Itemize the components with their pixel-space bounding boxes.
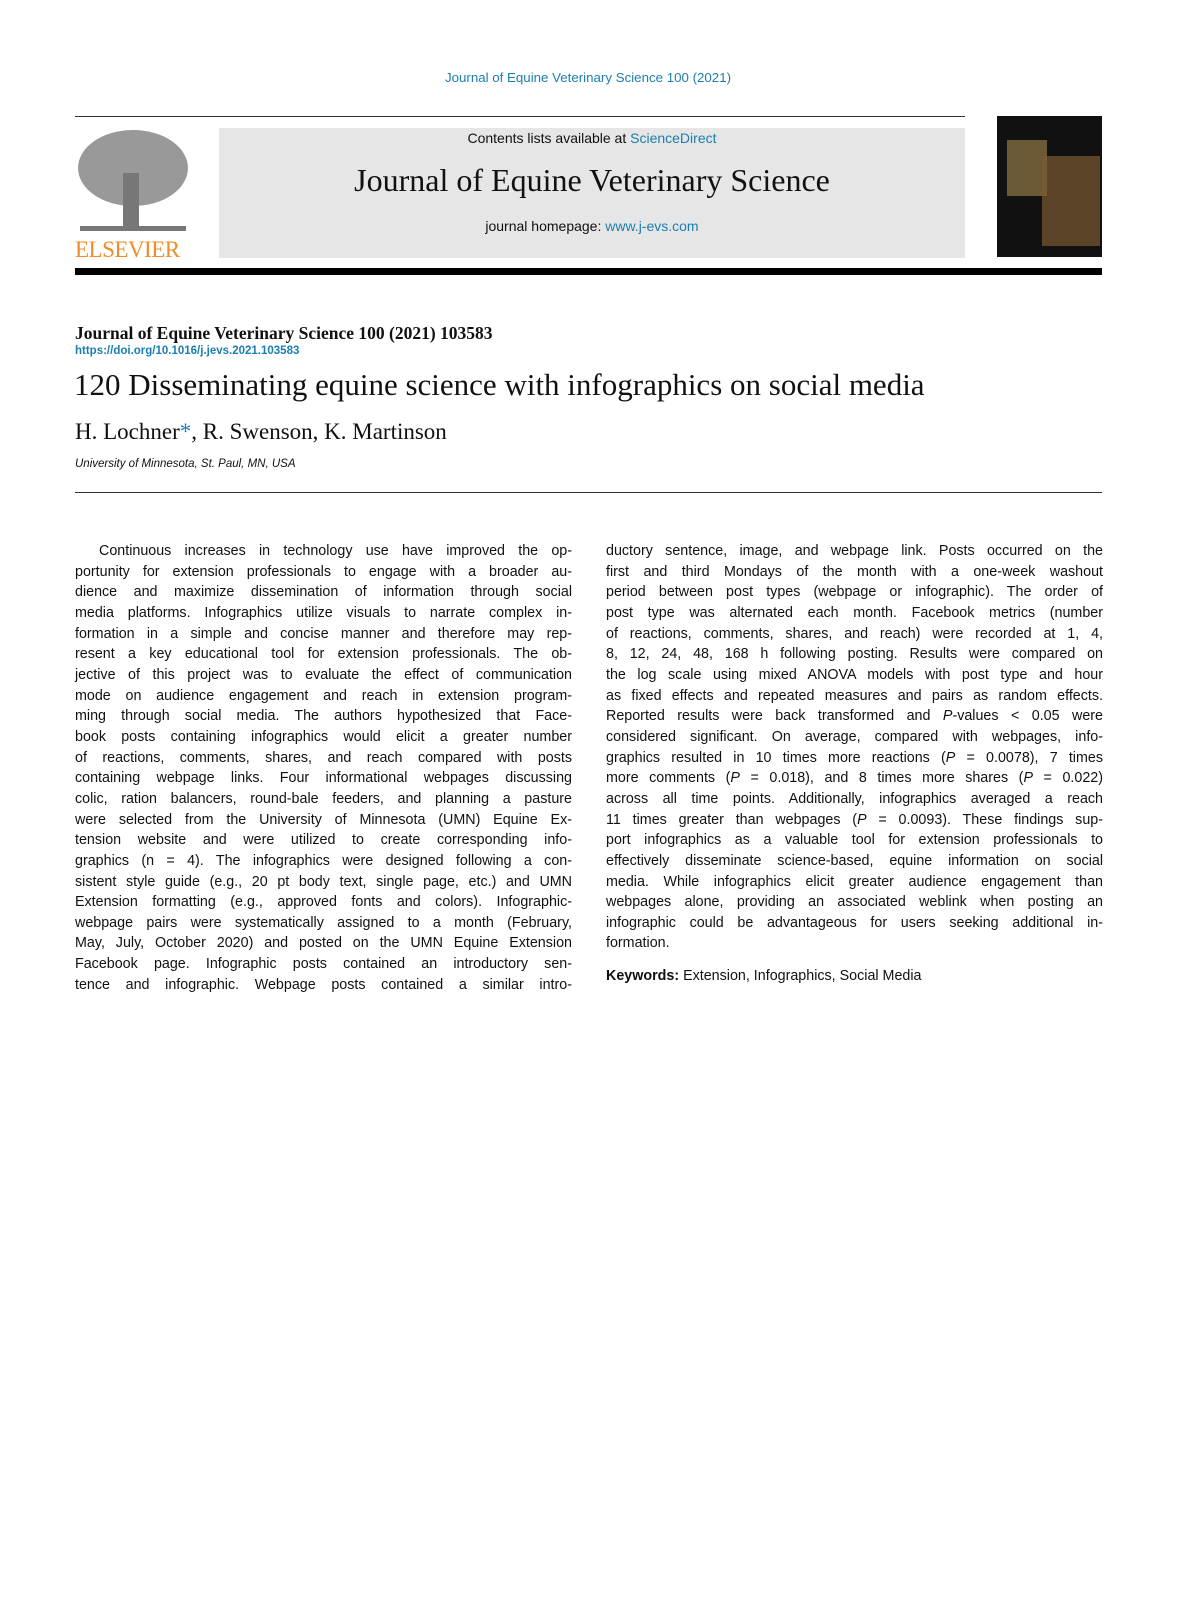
text block: left column: May, July, October 2020) and posted on the UMN Equine Extension	[75, 935, 572, 951]
masthead panel	[219, 128, 965, 258]
text block: left column: graphics (n = 4). The infographics were designed following a con-	[75, 853, 572, 869]
text block: right column: of reactions, comments, shares, and reach) were recorded at 1, 4,	[606, 626, 1103, 642]
text block: right column: post type was alternated each month. Facebook metrics (number	[606, 605, 1103, 621]
text block: right column: effectively disseminate science-based, equine information on social	[606, 853, 1103, 869]
text block: left column: book posts containing infographics would elicit a greater number	[75, 729, 572, 745]
text block: left column: formation in a simple and concise manner and therefore may rep-	[75, 626, 572, 642]
text block: left column: webpage pairs were systematically assigned to a month (February,	[75, 915, 572, 931]
text block: right column: graphics resulted in 10 times more reactions (P = 0.0078), 7 times	[606, 750, 1103, 766]
text block: left column: tence and infographic. Webpage posts contained a similar intro-	[75, 977, 572, 993]
text block: right column: Reported results were back transformed and P-values < 0.05 were	[606, 708, 1103, 724]
text block: right column: period between post types (webpage or infographic). The order of	[606, 584, 1103, 600]
text block: left column: portunity for extension professionals to engage with a broader au-	[75, 564, 572, 580]
text block: left column: colic, ration balancers, round-bale feeders, and planning a pasture	[75, 791, 572, 807]
masthead panel: Contents lists available at ScienceDirect	[467, 130, 716, 146]
text block: right column: media. While infographics elicit greater audience engagement than	[606, 874, 1103, 890]
text block: right column: port infographics as a valuable tool for extension professionals to	[606, 832, 1103, 848]
text block: right column: more comments (P = 0.018), and 8 times more shares (P = 0.022)	[606, 770, 1103, 786]
text block: left column: mode on audience engagement and reach in extension program-	[75, 688, 572, 704]
title: 120 Disseminating equine science with infographics on social media	[74, 367, 925, 402]
text block: right column: as fixed effects and repeated measures and pairs as random effects.	[606, 688, 1103, 704]
text block: left column	[74, 543, 572, 993]
text block: left column: Continuous increases in technology use have improved the op-	[99, 543, 572, 559]
text block: right column: Keywords: Extension, Infographics, Social Media	[606, 968, 921, 984]
masthead panel: journal homepage: www.j-evs.com	[485, 218, 699, 234]
text block: right column: 8, 12, 24, 48, 168 h following posting. Results were compared on	[606, 646, 1103, 662]
text block: left column: containing webpage links. Four informational webpages discussing	[75, 770, 572, 786]
text block: left column: ming through social media. The authors hypothesized that Face-	[75, 708, 572, 724]
text block: left column: tension website and were utilized to create corresponding info-	[75, 832, 572, 848]
masthead panel: Journal of Equine Veterinary Science	[354, 162, 830, 198]
text block: right column: across all time points. Additionally, infographics averaged a reach	[606, 791, 1103, 807]
logo: Elsevier: ELSEVIER	[75, 237, 180, 262]
text block: right column: infographic could be advantageous for users seeking additional in-	[606, 915, 1103, 931]
text block: right column: webpages alone, providing an associated weblink when posting an	[606, 894, 1103, 910]
running header: Journal of Equine Veterinary Science 100 (2021)	[445, 70, 731, 85]
text block: left column: Facebook page. Infographic posts contained an introductory sen-	[75, 956, 572, 972]
citation: Journal of Equine Veterinary Science 100 (2021) 103583	[75, 323, 493, 343]
logo: Elsevier	[75, 130, 188, 262]
text block: left column: of reactions, comments, shares, and reach compared with posts	[75, 750, 572, 766]
text block: right column: formation.	[606, 935, 670, 951]
text block: left column: media platforms. Infographics utilize visuals to narrate complex in-	[75, 605, 572, 621]
text: https://doi.org/10.1016/j.jevs.2021.103583	[75, 345, 299, 357]
text block: right column	[606, 543, 1103, 984]
text block: left column: jective of this project was to evaluate the effect of communication	[75, 667, 572, 683]
text block: right column: ductory sentence, image, and webpage link. Posts occurred on the	[606, 543, 1103, 559]
text block: left column: resent a key educational tool for extension professionals. The ob-	[75, 646, 572, 662]
text block: left column: dience and maximize dissemination of information through social	[75, 584, 572, 600]
text block: right column: the log scale using mixed ANOVA models with post type and hour	[606, 667, 1103, 683]
text block: left column: Extension formatting (e.g., approved fonts and colors). Infographic-	[75, 894, 572, 910]
text block: right column: 11 times greater than webpages (P = 0.0093). These findings sup-	[606, 812, 1103, 828]
text block: left column: were selected from the University of Minnesota (UMN) Equine Ex-	[75, 812, 572, 828]
text block: right column: first and third Mondays of the month with a one-week washout	[606, 564, 1103, 580]
text block: left column: sistent style guide (e.g., 20 pt body text, single page, etc.) and UMN	[75, 874, 572, 890]
text block: right column: considered significant. On average, compared with webpages, info-	[606, 729, 1103, 745]
authors: H. Lochner*, R. Swenson, K. Martinson	[75, 419, 447, 444]
affiliation: University of Minnesota, St. Paul, MN, USA	[75, 458, 296, 470]
journal cover	[997, 116, 1102, 257]
